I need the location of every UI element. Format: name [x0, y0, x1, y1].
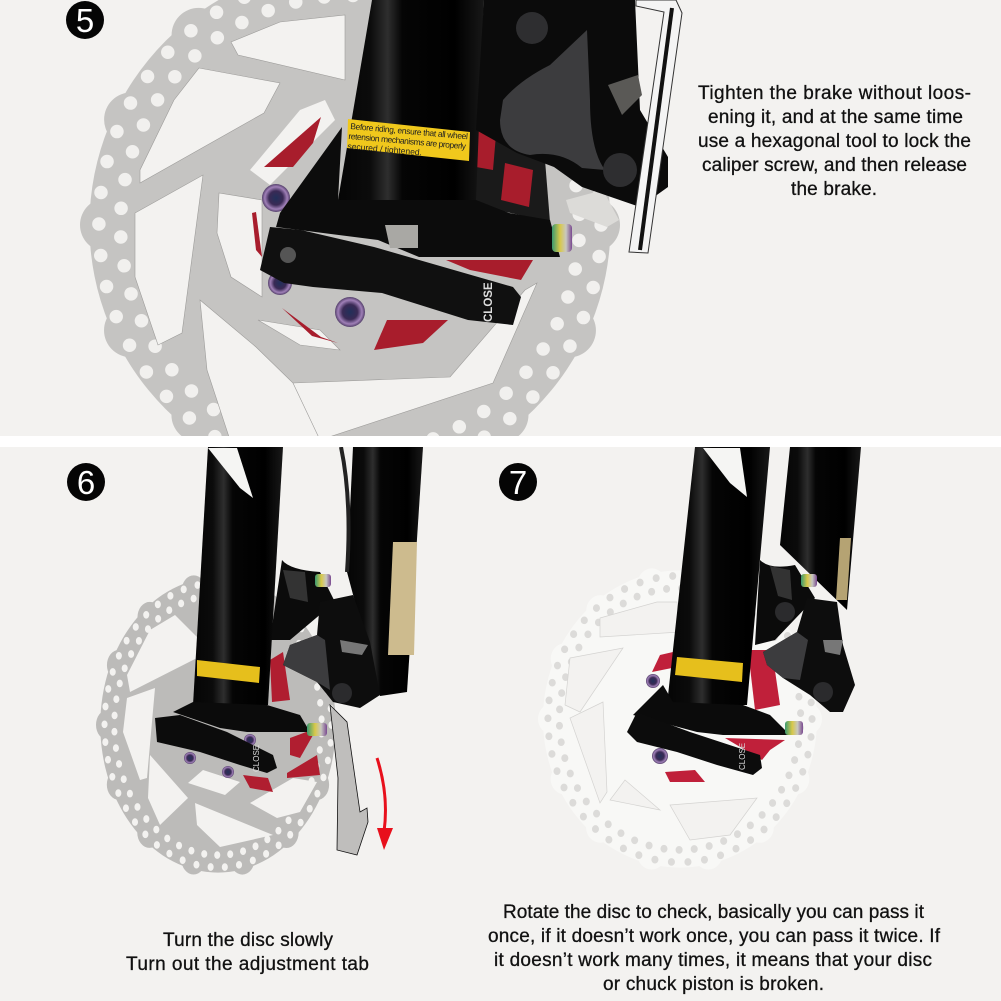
badge: step 5	[66, 1, 104, 39]
warning label	[347, 119, 470, 161]
fork dropout	[276, 127, 560, 257]
fork dropout	[633, 685, 790, 735]
lower mount bolt	[785, 721, 803, 735]
caliper	[763, 598, 855, 712]
main fork tube	[667, 447, 770, 705]
fork bridge	[270, 560, 335, 640]
text: step 5 instructions: the brake.	[791, 179, 877, 200]
upper mount bolt	[770, 566, 817, 600]
warning label: secured / tightened.	[347, 141, 422, 157]
brake hose	[341, 447, 349, 572]
text: step 5 instructions	[698, 83, 971, 200]
badge: step 7	[499, 463, 537, 501]
dark gap behind caliper	[476, 130, 550, 222]
caliper	[283, 595, 380, 708]
panel: step 5 photo	[89, 0, 682, 486]
quick release lever	[260, 227, 521, 325]
feeler gauge tool	[330, 705, 368, 855]
disc screws	[646, 674, 668, 764]
warning label: Before riding, ensure that all wheel	[350, 121, 468, 141]
quick release lever	[627, 712, 762, 775]
fork label	[836, 538, 851, 600]
badge: step 5: 5	[76, 2, 94, 39]
badge: step 6: 6	[77, 464, 95, 501]
fork label	[388, 542, 417, 655]
warning label	[675, 657, 743, 682]
brake disc	[543, 570, 817, 868]
red hub	[652, 650, 785, 782]
text: step 5 instructions: Tighten the brake without loos-	[698, 83, 971, 104]
upper mount bolt	[283, 570, 331, 602]
shiny pad tab	[566, 190, 619, 227]
caliper bolt	[552, 224, 572, 252]
badge: step 6	[67, 463, 105, 501]
panel: step 7 photo	[543, 447, 861, 868]
text: step 6 instructions	[126, 930, 369, 975]
text: step 7 instructions: it doesn’t work many times, it means that your disc	[494, 950, 932, 971]
quick release lever	[155, 715, 277, 773]
text: step 5 instructions: ening it, and at the same time	[708, 107, 963, 128]
tube white stripe	[208, 448, 253, 498]
caliper	[476, 0, 668, 207]
text: step 5 instructions: use a hexagonal tool to lock the	[698, 131, 971, 152]
axle nut	[385, 225, 418, 248]
red hub	[243, 652, 320, 792]
quick release lever: CLOSE	[483, 282, 495, 322]
text: step 6 instructions: Turn the disc slowly	[163, 930, 334, 951]
text: step 7 instructions: Rotate the disc to check, basically you can pass it	[503, 902, 925, 923]
brake disc	[100, 577, 336, 873]
text: step 7 instructions: or chuck piston is broken.	[603, 974, 824, 995]
red arrow	[377, 758, 393, 850]
hex key tool	[629, 0, 682, 253]
disc screws	[184, 734, 256, 778]
fork bridge	[755, 560, 815, 645]
text: step 5 instructions: caliper screw, and then release	[702, 155, 967, 176]
panel: step 6 photo	[100, 447, 423, 873]
badge: step 7: 7	[509, 464, 527, 501]
disc screws	[262, 184, 365, 327]
rear fork leg	[780, 447, 861, 610]
divider band	[0, 436, 1001, 447]
warning label	[197, 660, 260, 683]
warning label: retension mechanisms are properly	[348, 131, 467, 151]
text: step 6 instructions: Turn out the adjustment tab	[126, 954, 369, 975]
text: step 7 instructions: once, if it doesn’t work once, you can pass it twice. If	[488, 926, 941, 947]
quick release lever: CLOSE	[738, 743, 747, 770]
fork tube	[338, 0, 484, 212]
lower mount bolt	[307, 723, 327, 736]
main fork tube	[193, 447, 283, 705]
quick release lever: CLOSE	[252, 745, 261, 772]
brake disc	[89, 0, 611, 486]
text: step 7 instructions	[488, 902, 941, 995]
fork dropout	[173, 702, 310, 732]
red hub	[252, 107, 533, 350]
tube white stripe	[703, 448, 747, 497]
rear fork leg	[347, 447, 423, 696]
